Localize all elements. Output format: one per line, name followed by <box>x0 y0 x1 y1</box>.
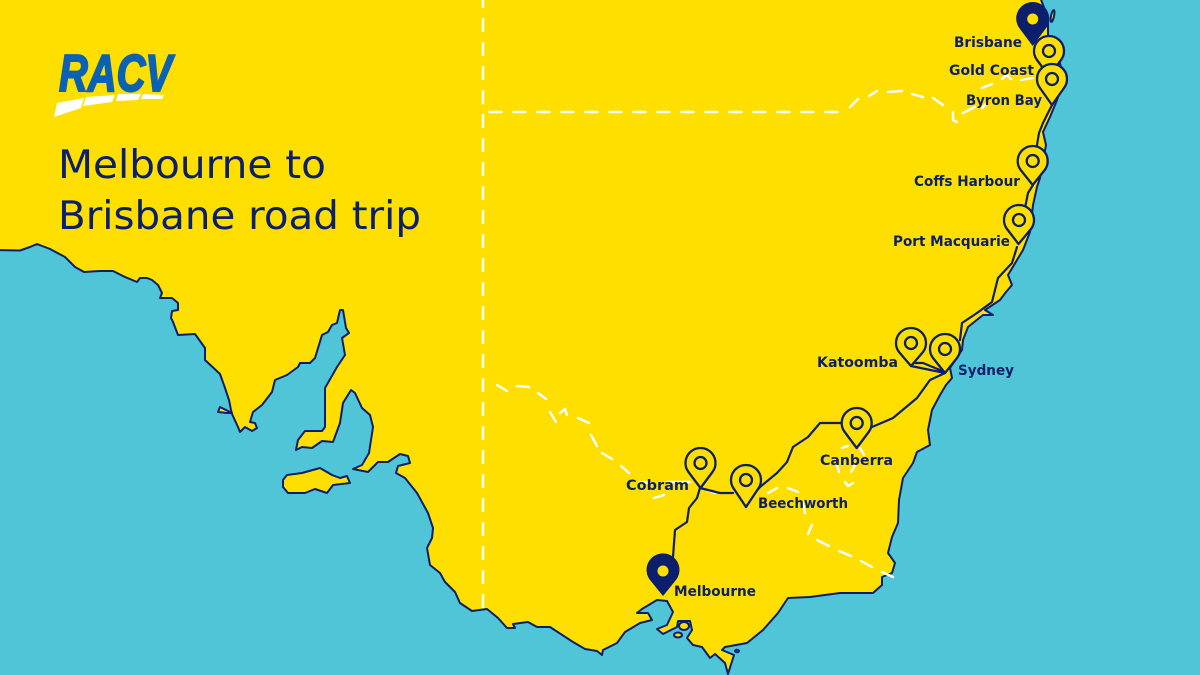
pin: Coffs Harbour <box>1018 146 1048 185</box>
pin: Sydney <box>930 334 960 373</box>
map: Kangaroo Island <box>283 468 350 493</box>
pin: Cobram <box>686 448 716 488</box>
logo: RACV <box>54 45 175 117</box>
label: Melbourne: Melbourne <box>674 584 756 600</box>
label: Beechworth: Beechworth <box>758 496 848 512</box>
label: Port Macquarie: Port Macquarie <box>893 234 1010 250</box>
label: Byron Bay: Byron Bay <box>966 93 1042 109</box>
logo: RACV: RACV <box>59 45 175 103</box>
pin: Brisbane <box>1016 2 1049 46</box>
label: Canberra: Canberra <box>820 453 893 469</box>
label: Gold Coast: Gold Coast <box>949 63 1034 79</box>
map: small islands <box>218 10 1055 652</box>
label: Cobram: Cobram <box>626 478 689 494</box>
title: Brisbane road trip <box>58 194 421 239</box>
label: Sydney: Sydney <box>958 363 1014 379</box>
label: Brisbane: Brisbane <box>954 35 1022 51</box>
label: Katoomba: Katoomba <box>817 355 898 371</box>
label: Coffs Harbour: Coffs Harbour <box>914 174 1020 190</box>
pin: Gold Coast <box>1034 36 1064 76</box>
pin: Byron Bay <box>1037 64 1067 105</box>
pin: Port Macquarie <box>1004 205 1034 244</box>
title: Melbourne to <box>58 143 326 188</box>
pin: Beechworth <box>731 465 761 507</box>
pin: Katoomba <box>896 328 926 366</box>
state border dashes <box>483 0 1033 608</box>
road route <box>673 103 1053 557</box>
pin: Canberra <box>842 408 872 448</box>
pin: Melbourne <box>647 553 680 596</box>
